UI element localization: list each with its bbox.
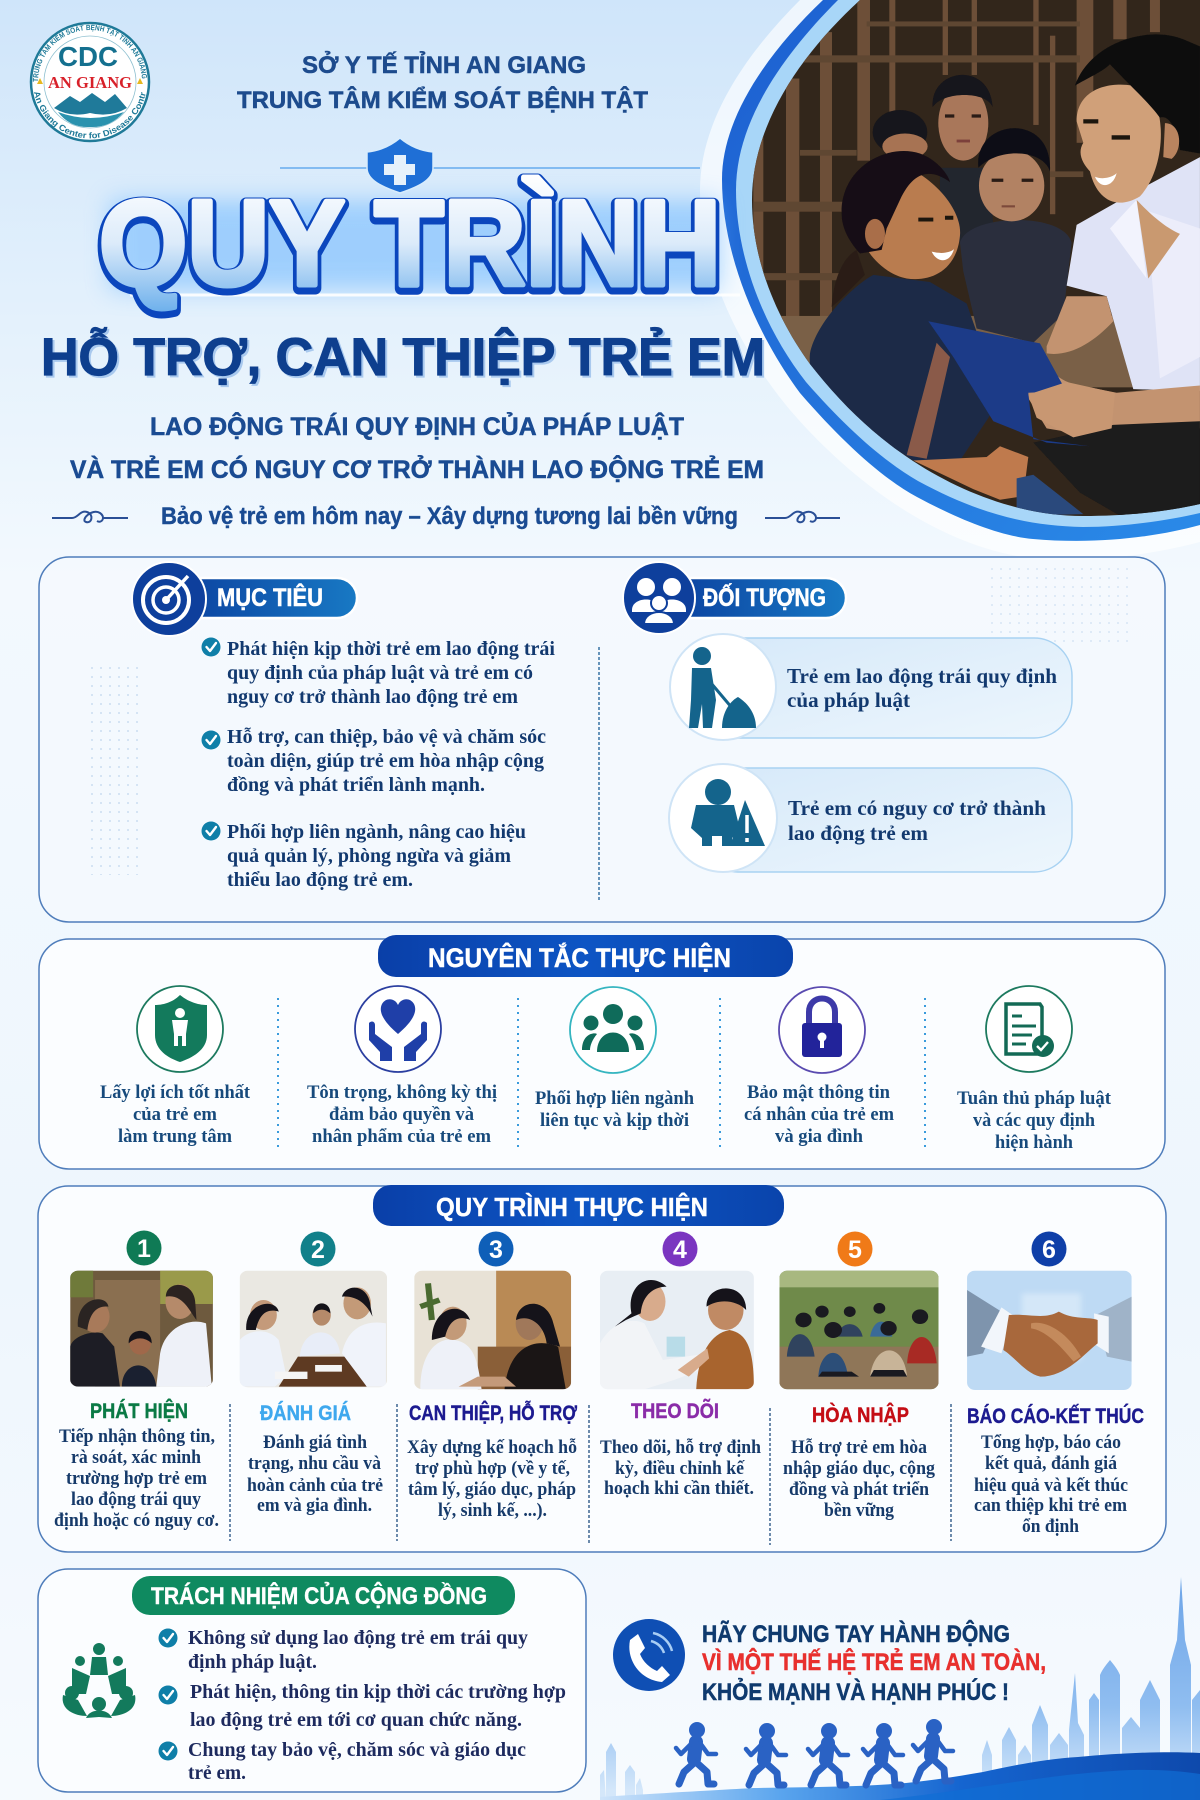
muc tieu list: quy định của pháp luật và trẻ em có	[227, 662, 533, 684]
step numbers: 1	[137, 1235, 151, 1263]
step texts: em và gia đình.	[257, 1496, 372, 1516]
logo: CDC	[58, 41, 118, 72]
heading: NGUYÊN TẮC THỰC HIỆN	[428, 942, 731, 973]
muc tieu list: Phối hợp liên ngành, nâng cao hiệu	[227, 821, 526, 843]
muc tieu list: toàn diện, giúp trẻ em hòa nhập cộng	[227, 750, 545, 772]
title shield icon	[367, 138, 433, 193]
heading	[378, 935, 793, 977]
panel: quy trinh	[38, 1185, 1166, 1552]
back child left	[873, 110, 928, 159]
dividers	[278, 998, 925, 1147]
card: at risk: lao động trẻ em	[788, 821, 928, 845]
principle texts: Lấy lợi ích tốt nhất	[100, 1082, 251, 1103]
subtitle lines: VÀ TRẺ EM CÓ NGUY CƠ TRỞ THÀNH LAO ĐỘNG TRẺ EM	[70, 454, 764, 484]
card: at risk	[669, 764, 1072, 872]
step numbers	[126, 1230, 1066, 1266]
icon: community	[63, 1643, 135, 1718]
checklist: Phát hiện, thông tin kịp thời các trường hợp	[190, 1681, 566, 1703]
heading	[373, 1185, 784, 1226]
badge: doi tuong: ĐỐI TƯỢNG	[703, 582, 826, 612]
badge: muc tieu: MỤC TIÊU	[217, 582, 323, 612]
step headings: HÒA NHẬP	[812, 1403, 909, 1427]
panel: trach nhiem cong dong	[38, 1569, 586, 1792]
logo	[30, 22, 150, 142]
step texts: nhập giáo dục, cộng	[783, 1459, 936, 1479]
checklist: lao động trẻ em tới cơ quan chức năng.	[190, 1709, 522, 1731]
badge: doi tuong	[623, 562, 846, 634]
step texts	[54, 1427, 1128, 1537]
step headings: ĐÁNH GIÁ	[260, 1402, 351, 1425]
step texts: Xây dựng kế hoạch hỗ	[407, 1438, 577, 1458]
heading	[132, 1576, 515, 1615]
photo: integrate	[779, 1271, 939, 1389]
title glow and light streaks	[110, 168, 740, 295]
checklist: định pháp luật.	[188, 1651, 317, 1673]
header organisation	[237, 50, 648, 114]
subtitle: HỖ TRỢ, CAN THIỆP TRẺ EM	[41, 326, 765, 387]
icon: document	[986, 986, 1072, 1072]
city skyline	[600, 1577, 1200, 1800]
principle texts: hiện hành	[995, 1132, 1073, 1153]
step texts: Hỗ trợ trẻ em hòa	[791, 1438, 927, 1458]
step headings: CAN THIỆP, HỖ TRỢ	[409, 1401, 577, 1425]
principle texts	[100, 1082, 1112, 1153]
heading: QUY TRÌNH THỰC HIỆN	[436, 1192, 708, 1222]
panel: muc tieu and doi tuong	[39, 557, 1165, 922]
step numbers: 2	[311, 1236, 325, 1264]
card: at risk: Trẻ em có nguy cơ trở thành	[788, 796, 1046, 820]
step texts: rà soát, xác minh	[71, 1448, 202, 1468]
badge: muc tieu	[132, 562, 357, 636]
step numbers: 4	[673, 1236, 687, 1264]
step texts: định hoặc có nguy cơ.	[54, 1511, 219, 1531]
checklist: Không sử dụng lao động trẻ em trái quy	[188, 1627, 529, 1649]
step texts: Đánh giá tình	[263, 1433, 368, 1453]
step texts: trạng, nhu cầu và	[248, 1454, 381, 1474]
step headings	[90, 1399, 1144, 1428]
step texts: kỳ, điều chỉnh kế	[615, 1459, 746, 1479]
muc tieu list	[202, 638, 555, 891]
call to action	[702, 1620, 1046, 1706]
step numbers: 3	[489, 1236, 503, 1264]
principle texts: Tôn trọng, không kỳ thị	[307, 1082, 497, 1103]
principle texts: và gia đình	[775, 1126, 863, 1147]
photo: handshake	[967, 1271, 1132, 1390]
step headings: BÁO CÁO-KẾT THÚC	[967, 1404, 1144, 1428]
nurse	[1025, 34, 1200, 518]
step headings: PHÁT HIỆN	[90, 1399, 188, 1423]
checklist: trẻ em.	[188, 1762, 246, 1784]
photo: detect	[70, 1271, 213, 1387]
step texts: hiệu quả và kết thúc	[974, 1476, 1128, 1496]
muc tieu list: nguy cơ trở thành lao động trẻ em	[227, 686, 518, 708]
icon: people	[570, 987, 656, 1073]
step texts: kết quả, đánh giá	[985, 1454, 1117, 1474]
running children	[676, 1719, 953, 1785]
step texts: bền vững	[824, 1501, 895, 1521]
muc tieu list: Phát hiện kịp thời trẻ em lao động trái	[227, 638, 555, 660]
muc tieu list: quả quản lý, phòng ngừa và giảm	[227, 845, 511, 867]
subtitle lines: LAO ĐỘNG TRÁI QUY ĐỊNH CỦA PHÁP LUẬT	[150, 411, 684, 441]
step texts: can thiệp khi trẻ em	[974, 1496, 1128, 1516]
logo: AN GIANG	[48, 73, 132, 92]
principle texts: Bảo mật thông tin	[747, 1082, 890, 1103]
child right	[960, 128, 1072, 343]
principle texts: nhân phẩm của trẻ em	[312, 1126, 491, 1147]
title: QUY TRÌNH	[99, 175, 721, 311]
step texts: Tiếp nhận thông tin,	[59, 1427, 215, 1447]
logo: TRUNG TÂM KIỂM SOÁT BỆNH TẬT TỈNH AN GIANG	[32, 24, 147, 82]
step texts: hoạch khi cần thiết.	[604, 1479, 754, 1499]
photo: follow up	[600, 1271, 754, 1389]
hero photo	[740, 0, 1200, 530]
muc tieu list: đồng và phát triển lành mạnh.	[227, 774, 485, 796]
icon: heart hands	[355, 986, 441, 1072]
muc tieu list: thiểu lao động trẻ em.	[227, 869, 413, 891]
header organisation: TRUNG TÂM KIỂM SOÁT BỆNH TẬT	[237, 86, 648, 114]
call to action: VÌ MỘT THẾ HỆ TRẺ EM AN TOÀN,	[702, 1647, 1046, 1676]
step numbers: 6	[1042, 1236, 1056, 1264]
panel: nguyen tac	[39, 935, 1165, 1169]
icon: shield	[137, 986, 223, 1072]
step numbers: 5	[848, 1236, 862, 1264]
header organisation: SỞ Y TẾ TỈNH AN GIANG	[302, 50, 586, 79]
principle texts: Tuân thủ pháp luật	[957, 1088, 1112, 1109]
step texts: lao động trái quy	[71, 1490, 202, 1510]
subtitle lines	[70, 411, 764, 484]
step texts: lý, sinh kế, ...).	[438, 1501, 547, 1521]
icon: phone	[613, 1619, 685, 1691]
principle texts: của trẻ em	[133, 1104, 217, 1125]
checklist: Chung tay bảo vệ, chăm sóc và giáo dục	[188, 1739, 526, 1761]
card: child labour: Trẻ em lao động trái quy định	[787, 664, 1057, 688]
principle texts: và các quy định	[973, 1110, 1095, 1131]
principle texts: làm trung tâm	[118, 1126, 232, 1147]
step headings: THEO DÕI	[631, 1399, 719, 1423]
clipboard	[928, 321, 1090, 446]
principle texts: Phối hợp liên ngành	[535, 1088, 694, 1109]
wave	[600, 1752, 1200, 1800]
checklist	[158, 1627, 566, 1784]
step texts: ổn định	[1022, 1517, 1080, 1537]
principle texts: đảm bảo quyền và	[329, 1104, 474, 1125]
hero ring swoosh	[700, 0, 1200, 560]
step texts: trợ phù hợp (về y tế,	[415, 1459, 570, 1479]
girl	[810, 151, 1083, 516]
title: QUY TRÌNH	[99, 178, 721, 314]
step texts: hoàn cảnh của trẻ	[247, 1476, 383, 1496]
muc tieu list: Hỗ trợ, can thiệp, bảo vệ và chăm sóc	[227, 726, 546, 748]
back child centre	[933, 75, 993, 250]
call to action: KHỎE MẠNH VÀ HẠNH PHÚC !	[702, 1677, 1009, 1706]
card: child labour	[670, 634, 1072, 740]
heading: TRÁCH NHIỆM CỦA CỘNG ĐỒNG	[151, 1581, 487, 1610]
icon: lock	[779, 987, 865, 1073]
wooden wall	[753, 0, 1187, 387]
principle texts: cá nhân của trẻ em	[744, 1104, 894, 1125]
step texts: trường hợp trẻ em	[66, 1469, 208, 1489]
step texts: đồng và phát triển	[789, 1480, 930, 1500]
card: child labour: của pháp luật	[787, 688, 910, 712]
step texts: tâm lý, giáo dục, pháp	[408, 1480, 576, 1500]
slogan: Bảo vệ trẻ em hôm nay – Xây dựng tương lai bền vững	[161, 503, 738, 530]
photo: assess	[240, 1271, 387, 1387]
step texts: Theo dõi, hỗ trợ định	[600, 1438, 762, 1458]
principle texts: liên tục và kịp thời	[540, 1110, 689, 1131]
call to action: HÃY CHUNG TAY HÀNH ĐỘNG	[702, 1620, 1010, 1648]
photo: intervene	[414, 1271, 571, 1389]
step texts: Tổng hợp, báo cáo	[981, 1433, 1121, 1453]
